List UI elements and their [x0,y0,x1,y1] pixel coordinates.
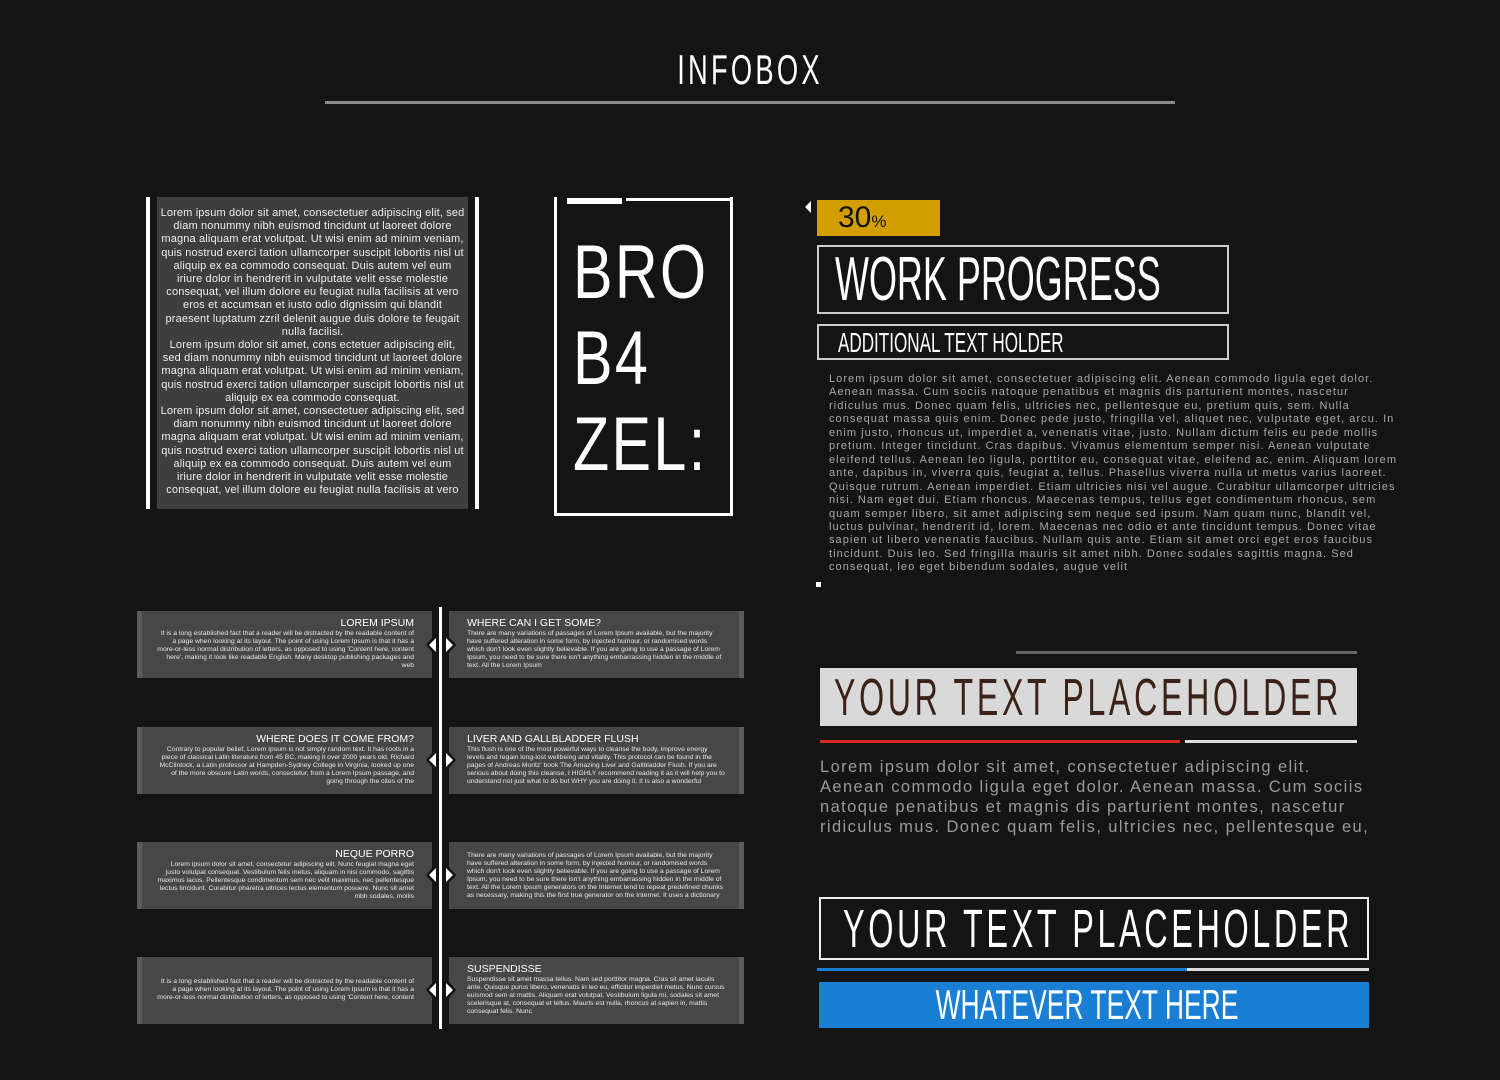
row 1 left [137,611,432,678]
text block: Lorem ipsum dolor sit amet, consectetuer adipiscing elit, sed diam nonummy nibh euismod tincidunt ut laoreet dolore magna aliquam erat volutpat. Ut wisi enim ad minim veniam, quis nostrud exerci tation ullamcorper suscipit lobortis nisl ut aliquip ex ea commodo consequat. Duis autem vel eum iriure dolor in hendrerit in vulputate velit esse molestie consequat, vel illum dolore eu feugiat nulla facilisis at vero eros et accumsan et iusto odio dignissim qui blandit praesent luptatum zzril delenit augue duis dolore te feugait nulla facilisi. [161,207,464,338]
icon: triangle [805,201,811,213]
heading: WORK PROGRESS [835,245,1161,314]
title: INFOBOX [677,46,823,93]
row 3 right: There are many variations of passages of Lorem Ipsum available, but the majority have suffered alteration in some form, by injected humour, or randomised words which don't look even slightly believable. If you are going to use a passage of Lorem Ipsum, you need to be sure there isn't anything embarrassing hidden in the middle of text. All the Lorem Ipsum generators on the Internet tend to repeat predefined chunks as necessary, making this the first true generator on the Internet. It uses a dictionary [467,852,723,899]
heading [573,230,708,487]
row 3 left: Lorem ipsum dolor sit amet, consectetur adipiscing elit. Nunc feugiat magna eget justo volutpat consequat. Vestibulum felis metus, aliquam in nisi commodo, sagittis maximus lacus. Pellentesque condimentum sem nec velit maximus, nec pellentesque lectus tincidunt. Curabitur pharetra ultrices lectus elementum posuere. Nunc sit amet nibh sodales, mollis [157,861,414,900]
row 1 left: LOREM IPSUM [340,617,414,629]
subheading [817,324,1229,360]
row 2 left [137,727,432,794]
row 1 right: WHERE CAN I GET SOME? [467,617,601,629]
paragraph [820,758,1369,836]
panel: BRO B4 ZEL box [554,197,733,516]
panel: placeholder 2 [817,897,1369,1028]
row 3 left: NEQUE PORRO [335,848,414,860]
row 3 left [137,842,432,909]
percent badge: 30% [838,201,886,234]
heading: placeholder box: YOUR TEXT PLACEHOLDER [834,669,1342,727]
text block: Lorem ipsum dolor sit amet, cons ectetuer adipiscing elit, sed diam nonummy nibh euismod tincidunt ut laoreet dolore magna aliquam erat volutpat. Ut wisi enim ad minim veniam, quis nostrud exerci tation ullamcorper suscipit lobortis nisl ut aliquip ex ea commodo consequat. [161,339,464,404]
row 2 right [449,727,744,794]
row 2 right: LIVER AND GALLBLADDER FLUSH [467,733,639,745]
panel: work progress [805,200,1397,587]
heading: B4 [573,316,650,401]
row 2 left: Contrary to popular belief, Lorem Ipsum is not simply random text. It has roots in a piece of classical Latin literature from 45 BC, making it over 2000 years old. Richard McClintock, a Latin professor at Hampden-Sydney College in Virginia, looked up one of the more obscure Latin words, consectetur, from a Lorem Ipsum passage, and going through the cites of the [159,746,414,785]
row 4 left: It is a long established fact that a reader will be distracted by the readable content of a page when looking at its layout. The point of using Lorem Ipsum is that it has a more-or-less normal distribution of letters, as opposed to using 'Content here, content [157,978,414,1001]
row 1 left: It is a long established fact that a reader will be distracted by the readable content of a page when looking at its layout. The point of using Lorem Ipsum is that it has a more-or-less normal distribution of letters, as opposed to using 'Content here, content here', making it look like readable English. Many desktop publishing packages and web [157,630,414,669]
paragraph: Lorem ipsum dolor sit amet, consectetuer adipiscing elit. [820,758,1311,776]
text block: Lorem ipsum dolor sit amet, consectetuer adipiscing elit, sed diam nonummy nibh euismod tincidunt ut laoreet dolore magna aliquam erat volutpat. Ut wisi enim ad minim veniam, quis nostrud exerci tation ullamcorper suscipit lobortis nisl ut aliquip ex ea commodo consequat. Duis autem vel eum iriure dolor in hendrerit in vulputate velit esse molestie consequat, vel illum dolore eu feugiat nulla facilisis at vero [161,405,464,496]
paragraph: Aenean commodo ligula eget dolor. Aenean massa. Cum sociis [820,778,1363,796]
row 2 right: This flush is one of the most powerful ways to cleanse the body, improve energy levels and regain long-lost wellbeing and vitality. This protocol can be found in the pages of Andreas Moritz' book The Amazing Liver and Gallbladder Flush. If you are serious about doing this cleanse, I HIGHLY recommend reading it as it will help you to understand not just what to do but WHY you are doing it. It is also a wonderful [467,746,725,785]
row 4 right: SUSPENDISSE [467,963,542,975]
row 4 right [449,957,744,1024]
row 2 left: WHERE DOES IT COME FROM? [256,733,414,745]
text block [157,197,468,509]
heading: ZEL: [573,402,708,487]
row 3 right [449,842,744,909]
row 4 left [137,957,432,1024]
banner [819,982,1369,1028]
paragraph: ridiculus mus. Donec quam felis, ultricies nec, pellentesque eu, [820,818,1369,836]
row 4 right: Suspendisse sit amet massa tellus. Nam sed porttitor magna. Cras sit amet iaculis ante. Quisque purus libero, venenatis in leo eu, efficitur imperdiet metus. Nunc cursus euismod sem at mattis. Aliquam erat volutpat. Vestibulum ligula mi, sodales sit amet scelerisque at, consequat et tellus. Mauris est nulla, rhoncus at sapien in, mattis consequat felis. Nunc [467,976,725,1015]
paragraph: natoque penatibus et magnis dis parturient montes, nascetur [820,798,1346,816]
panel: placeholder 1 [820,651,1369,836]
icon: timeline arrows [426,637,456,998]
row 1 right: There are many variations of passages of Lorem Ipsum available, but the majority have suffered alteration in some form, by injected humour, or randomised words which don't look even slightly believable. If you are going to use a passage of Lorem Ipsum, you need to be sure there isn't anything embarrassing hidden in the middle of text. All the Lorem Ipsum [467,630,721,669]
timeline [439,607,442,1029]
banner: WHATEVER TEXT HERE [936,981,1238,1028]
paragraph: Lorem ipsum dolor sit amet, consectetuer adipiscing elit. Aenean commodo ligula eget dolor. Aenean massa. Cum sociis natoque penatibus et magnis dis parturient montes, nascetur ridiculus mus. Donec quam felis, ultricies nec, pellentesque eu, pretium quis, sem. Nulla consequat massa quis enim. Donec pede justo, fringilla vel, aliquet nec, vulputate eget, arcu. In enim justo, rhoncus ut, imperdiet a, venenatis vitae, justo. Nullam dictum felis eu pede mollis pretium. Integer tincidunt. Cras dapibus. Vivamus elementum semper nisi. Aenean vulputate eleifend tellus. Aenean leo ligula, porttitor eu, consequat vitae, eleifend ac, enim. Aliquam lorem ante, dapibus in, viverra quis, feugiat a, tellus. Phasellus viverra nulla ut metus varius laoreet. Quisque rutrum. Aenean imperdiet. Etiam ultricies nisi vel augue. Curabitur ullamcorper ultricies nisi. Nam eget dui. Etiam rhoncus. Maecenas tempus, tellus eget condimentum rhoncus, sem quam semper libero, sit amet adipiscing sem neque sed ipsum. Nam quam nunc, blandit vel, luctus pulvinar, hendrerit id, lorem. Maecenas nec odio et ante tincidunt tempus. Donec vitae sapien ut libero venenatis faucibus. Nullam quis ante. Etiam sit amet orci eget eros faucibus tincidunt. Duis leo. Sed fringilla mauris sit amet nibh. Donec sodales sagittis magna. Sed consequat, leo eget bibendum sodales, augue velit [829,373,1397,573]
panel: left text block [146,197,479,509]
percent badge [817,200,940,236]
subheading: ADDITIONAL TEXT HOLDER [838,327,1064,358]
row 1 right [449,611,744,678]
heading: YOUR TEXT PLACEHOLDER [843,899,1353,959]
heading: BRO [573,230,708,315]
